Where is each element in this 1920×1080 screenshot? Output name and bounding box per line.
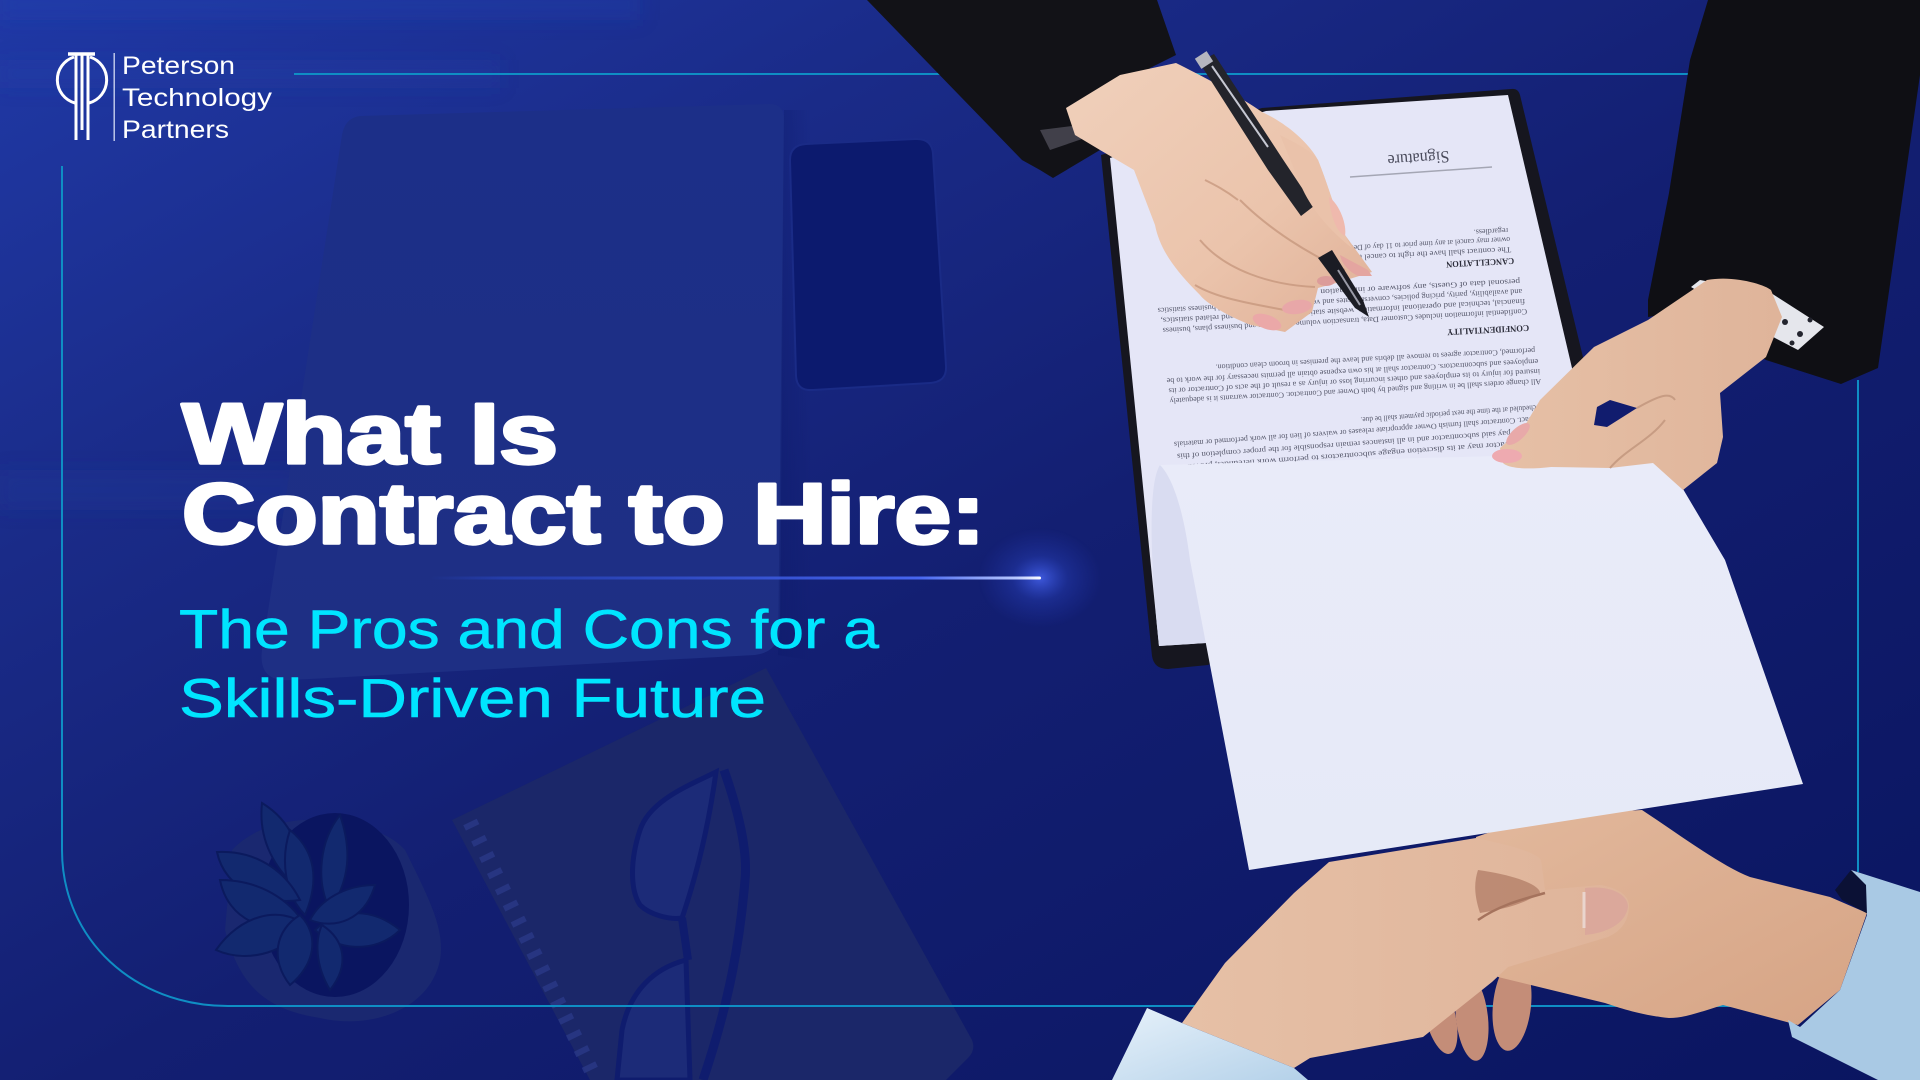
document text: and availability, parity, pricing policies, conversion rates and vendor, hotel, and other related business statistics <box>1157 287 1522 315</box>
divider rule <box>430 576 1041 580</box>
thumb finger gap <box>1594 400 1637 427</box>
index nail <box>1340 255 1372 276</box>
document text: All change orders shall be in writing and signed by both Owner and Contractor. Contractor warrants it is adequately <box>1169 377 1541 405</box>
subtitle <box>179 598 879 729</box>
finger nails <box>1281 298 1313 316</box>
faded glasses <box>617 770 746 1080</box>
faded laptop <box>262 104 784 680</box>
logo divider <box>114 53 115 141</box>
document text: owner may cancel at any time prior to 11 day of Dec <box>1350 235 1510 252</box>
left light blue cuff <box>1112 1008 1308 1080</box>
upper hand <box>1066 63 1372 334</box>
hand shading <box>1610 396 1675 468</box>
document text: Signature <box>1387 147 1450 170</box>
logo wordmark: Peterson <box>122 52 235 80</box>
right hand <box>1492 279 1782 490</box>
thumb nail front <box>1329 197 1345 236</box>
laptop edge shadow <box>778 110 810 660</box>
right black sleeve <box>1648 0 1920 384</box>
document text: regardless. <box>1474 226 1508 237</box>
document sheet <box>1110 95 1587 646</box>
left black sleeve <box>867 0 1176 178</box>
document text: shall fully pay said subcontractor and in all instances remain responsible for the proper completion of this <box>1177 426 1548 461</box>
document text: CONFIDENTIALITY <box>1447 323 1529 337</box>
logo <box>57 52 273 144</box>
thumb wrinkle <box>1478 893 1545 920</box>
page front <box>1160 456 1803 870</box>
right light blue cuff <box>1788 870 1920 1080</box>
lower fingers <box>1416 957 1536 1062</box>
pen upper <box>1195 51 1314 216</box>
document text: employees and subcontractors. Contractor shall at his own expense obtain all permits necessary for the work to be <box>1166 357 1538 385</box>
polka dot cuff <box>1691 280 1824 350</box>
document text: Confidential information includes Customer Data, transaction volume, marketing and business plans, business <box>1162 307 1527 335</box>
thumb nail <box>1585 887 1628 935</box>
plant leaves <box>216 803 400 990</box>
subtitle: Skills-Driven Future <box>179 667 766 729</box>
title <box>182 387 985 562</box>
curl inner <box>1152 465 1206 646</box>
logo wordmark: Partners <box>122 116 229 144</box>
document text <box>1157 147 1550 472</box>
clipboard <box>1101 89 1600 669</box>
document text: contract. Contractor shall furnish Owner appropriate releases or waivers of lien for all work performed or materials <box>1174 414 1545 449</box>
title: Contract to Hire: <box>182 467 985 562</box>
pen tip <box>1318 250 1369 317</box>
thumb over pen <box>1280 135 1352 248</box>
nails <box>1492 449 1522 463</box>
document text: personal data of Guests, any software or information <box>1320 277 1520 296</box>
document text: financial, technical and operational information, website statistics, marketing data, and related statistics, <box>1160 297 1525 325</box>
curled page <box>1152 456 1803 870</box>
document text: work. Contractor may at its discretion engage subcontractors to perform work hereunder, provided <box>1179 437 1550 472</box>
document text: CANCELLATION <box>1446 256 1514 270</box>
finger creases <box>1195 180 1345 312</box>
title: What Is <box>182 387 558 482</box>
logo mark <box>57 54 107 140</box>
glow light <box>978 528 1102 628</box>
right lower hand <box>1476 810 1867 1025</box>
sleeve shirt cuff edge <box>1040 125 1085 150</box>
document text: The contract shall have the right to cancel the <box>1351 245 1511 262</box>
logo wordmark: Technology <box>122 84 273 112</box>
document text: performed, Contractor agrees to remove all debris and leave the premises in broom clean condition. <box>1215 346 1535 372</box>
notebook spiral <box>470 822 596 1080</box>
faded phone <box>790 139 946 390</box>
faded notebook <box>452 668 973 1080</box>
left lower hand <box>1182 838 1629 1068</box>
faded plant pot <box>216 803 441 1021</box>
subtitle: The Pros and Cons for a <box>179 598 879 660</box>
document text: Scheduled at the time the next periodic payment shall be due. <box>1360 403 1540 425</box>
fist shadow <box>1475 870 1540 913</box>
document text: insured for injury to its employees and others incurring loss or injury as a result of the acts of Contractor or its <box>1168 367 1540 395</box>
logo wordmark <box>122 52 273 144</box>
